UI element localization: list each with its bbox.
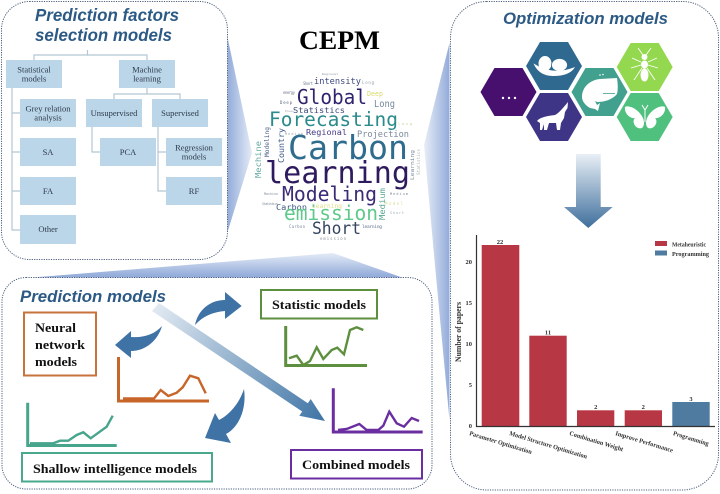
x axis category labels: Programming (672, 430, 710, 448)
word cloud: Medium (285, 132, 303, 136)
chart legend: Programming (672, 251, 710, 258)
tree box: grey relation analysis: analysis (34, 112, 62, 122)
word cloud: emission (284, 201, 378, 225)
x axis category labels: Parameter Optimization (468, 430, 533, 456)
heading: optimization models: Optimization models (503, 9, 668, 28)
heading: prediction factors selection models: Prediction factors (35, 5, 179, 25)
tree box: unsupervised (86, 99, 142, 127)
heading: prediction models: Prediction models (20, 287, 166, 306)
panel: prediction models (2, 278, 432, 489)
word cloud: Country (277, 128, 286, 163)
connector wedge: right panel to word cloud (424, 43, 450, 420)
chart legend: Metaheuristic (672, 242, 706, 248)
word cloud: learning (265, 156, 410, 191)
hexagon: whale (572, 68, 628, 116)
x axis category labels: Combination Weight (568, 430, 625, 454)
word cloud: Carbon (289, 224, 306, 229)
title: CEPM: CEPM (299, 26, 380, 55)
model box: shallow intelligence models (22, 453, 212, 482)
word cloud: Short (312, 219, 361, 238)
word cloud: Learning (410, 150, 416, 180)
word cloud: Carbon (276, 203, 307, 212)
word cloud: learning (362, 224, 382, 230)
model box: statistic models (261, 290, 377, 318)
hexagon: ant (617, 43, 673, 91)
tree box: SA (20, 138, 76, 166)
connector wedge: bottom panel to word cloud (33, 253, 402, 278)
tree box: machine learning: Machine (132, 64, 162, 74)
heading: prediction factors selection models: selection models (35, 25, 172, 45)
bar chart: number of papers (454, 235, 715, 461)
model box: neural network models (24, 312, 96, 376)
bar value labels: 11 (545, 330, 551, 336)
tree box: machine learning (119, 60, 175, 88)
word cloud: Short (390, 211, 404, 215)
tree box: FA (20, 177, 76, 205)
word cloud: Machine (264, 192, 278, 196)
tree box: statistical models: models (22, 74, 46, 84)
chart legend (655, 241, 710, 258)
bar value labels: 2 (594, 404, 597, 411)
y axis tick labels: 5 (469, 382, 473, 389)
chart axes (476, 235, 715, 426)
tree box: PCA: PCA (120, 147, 137, 157)
model box: statistic models: Statistic models (272, 297, 366, 312)
panel: optimization models (450, 2, 718, 490)
tree box: PCA (100, 138, 156, 166)
bars (482, 245, 710, 426)
tree box: other: Other (38, 224, 58, 234)
line chart: shallow intelligence models (28, 403, 117, 446)
line chart: statistic models (286, 326, 367, 366)
word cloud: Medium (390, 192, 408, 196)
y axis tick labels: 15 (466, 300, 473, 307)
word cloud: Global (297, 85, 367, 109)
word cloud: Projection (357, 130, 409, 140)
word cloud: long (398, 122, 412, 126)
arrow: down to bar chart (564, 154, 613, 228)
word cloud: Medium (378, 187, 387, 220)
word cloud: Regional (322, 72, 338, 76)
tree box: supervised (152, 99, 208, 127)
tree box: grey relation analysis (20, 99, 76, 127)
word cloud: Learning (312, 203, 342, 210)
model box: combined models: Combined models (302, 457, 410, 472)
word cloud: Forecasting (269, 108, 398, 131)
model box: shallow intelligence models: Shallow intelligence models (33, 461, 197, 476)
word cloud: Long (374, 99, 395, 110)
model box: neural network models: Neural (35, 320, 76, 335)
tree box: unsupervised: Unsupervised (91, 108, 138, 118)
word cloud: energy (283, 90, 296, 95)
line chart: combined models (333, 388, 423, 432)
arrow: curved to neural network models (115, 326, 162, 358)
tree box: machine learning: learning (133, 74, 162, 84)
tree box: RF (166, 177, 222, 205)
x axis category labels (468, 430, 710, 461)
word cloud: Model (385, 201, 404, 206)
tree box: regression models: models (182, 152, 206, 162)
x axis category labels: Model Structure Optimization (508, 430, 588, 461)
word cloud: Long (362, 80, 375, 85)
model box: neural network models: network (35, 337, 86, 352)
word cloud: Deep (367, 90, 383, 98)
word cloud: Short (303, 81, 314, 86)
y axis tick labels (466, 259, 473, 430)
arrow: diagonal to combined models (152, 303, 325, 421)
tree connector lines (12, 50, 180, 230)
tree box: grey relation analysis: Grey relation (25, 104, 71, 114)
y axis tick labels: 0 (469, 423, 472, 430)
word cloud: Power (285, 109, 295, 113)
word cloud: Mechine (254, 140, 263, 178)
y axis title: Number of papers (454, 302, 463, 362)
tree box: regression models: Regression (175, 142, 214, 152)
bar value labels: 22 (497, 239, 503, 246)
hexagon: butterfly (617, 93, 673, 141)
word cloud: Deep (280, 100, 293, 105)
word cloud (254, 72, 421, 241)
hexagon: wolf (526, 93, 582, 141)
panel: prediction factors selection models (2, 2, 228, 260)
hexagon: other algorithms (480, 68, 536, 116)
word cloud: Carbon (288, 128, 408, 167)
connector wedge: left panel to word cloud (226, 30, 252, 237)
arrow: curved to shallow intelligence models (205, 389, 245, 443)
model box: neural network models: models (35, 354, 77, 369)
word cloud: Modeling (282, 182, 377, 206)
tree box: statistical models (6, 60, 62, 88)
bar value labels: 3 (689, 396, 693, 403)
model box: combined models (291, 450, 422, 478)
tree box: RF: RF (189, 186, 199, 196)
word cloud: Statistics (262, 202, 278, 206)
word cloud: intensity (314, 77, 362, 87)
y axis tick labels: 20 (466, 259, 472, 266)
tree box: FA: FA (43, 186, 54, 196)
tree box: supervised: Supervised (161, 108, 200, 118)
bar value labels (497, 239, 693, 411)
tree box: regression models (166, 138, 222, 166)
x axis category labels: Improve Performance (614, 430, 674, 454)
line chart: neural network models (118, 357, 209, 401)
tree box: statistical models: Statistical (17, 64, 51, 74)
hexagon: cuckoo eggs (526, 42, 582, 90)
word cloud: emission (320, 236, 347, 241)
tree box: SA: SA (43, 147, 54, 157)
heading: prediction factors selection models (35, 5, 179, 45)
arrow: curved to statistic models (195, 292, 242, 325)
y axis tick labels: 10 (466, 341, 472, 348)
word cloud: Statistics (293, 106, 345, 115)
word cloud: Modeling (263, 127, 271, 157)
word cloud: Statistics (416, 148, 421, 175)
bar value labels: 2 (642, 404, 645, 411)
word cloud: Regional (306, 128, 347, 137)
tree box: other (20, 215, 76, 244)
